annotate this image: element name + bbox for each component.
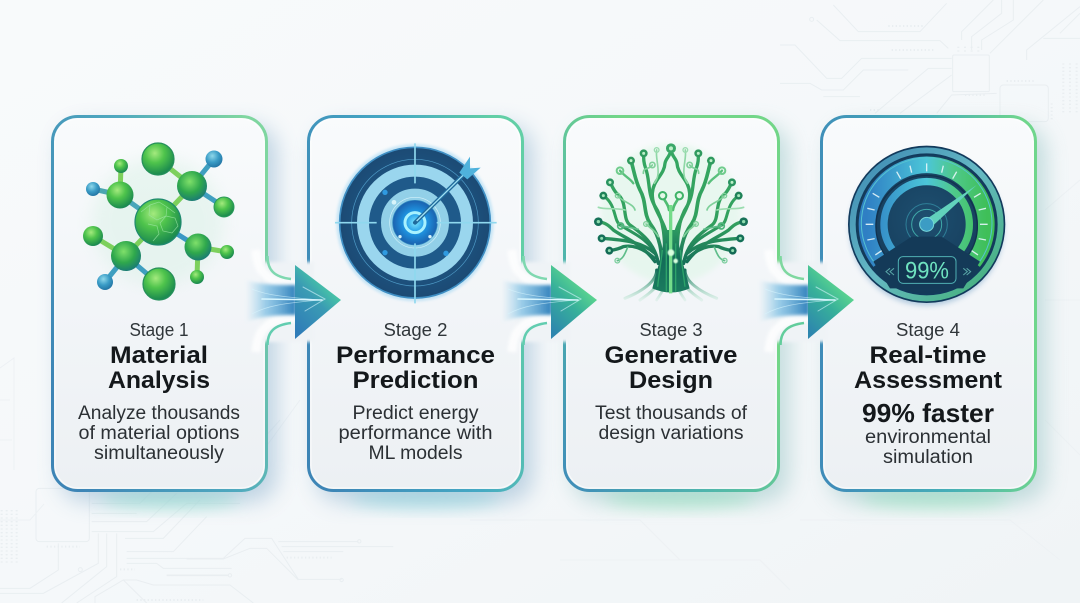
stage 2 text: ML models <box>368 443 462 464</box>
stage 1 text: Material <box>110 342 208 369</box>
panel: stage 3 <box>564 116 789 502</box>
stage 3 text: design variations <box>598 423 744 444</box>
stage 3 text: Stage 3 <box>640 320 702 340</box>
stage 3 text: Generative <box>604 342 738 369</box>
circuit pattern: bottom left <box>0 487 393 603</box>
stage 4 text <box>854 320 1002 468</box>
panel: stage 4 <box>822 116 1046 502</box>
stage 1 text: Analyze thousands <box>78 403 240 424</box>
icon: circuit tree <box>594 143 748 300</box>
stage 3 text: Test thousands of <box>595 403 748 424</box>
circuit pattern: top right <box>780 0 1080 122</box>
arrow: stage 3 to 4 <box>759 250 854 352</box>
stage 1 text: simultaneously <box>94 443 225 464</box>
stage 2 text: performance with <box>338 423 492 444</box>
arrow: stage 1 to 2 <box>246 250 341 352</box>
glow under cards <box>100 488 1010 508</box>
panel: stage 2 <box>308 116 533 502</box>
icon: speed gauge <box>848 146 1005 306</box>
stage 1 text: of material options <box>78 423 240 444</box>
stage 2 text: Stage 2 <box>384 320 448 340</box>
arrow: stage 2 to 3 <box>502 250 597 352</box>
stage 2 text <box>336 320 495 464</box>
stage 1 text <box>78 320 240 464</box>
stage 1 text: Stage 1 <box>130 320 188 340</box>
stage 4 text: Real-time <box>870 342 986 369</box>
trunk <box>652 230 690 292</box>
icon: molecule <box>83 143 234 300</box>
stage 4 text: Stage 4 <box>896 320 960 340</box>
stage 2 text: Prediction <box>352 367 478 394</box>
stage 4 text: simulation <box>883 447 973 468</box>
readout: 99% <box>905 257 949 284</box>
stage 4 text: 99% faster <box>862 398 994 428</box>
stage 1 text: Analysis <box>108 367 210 394</box>
circuit pattern: left side <box>0 180 1080 590</box>
stage 4 text: environmental <box>865 427 991 448</box>
panel: stage 1 <box>52 116 277 502</box>
stage 3 text: Design <box>629 367 713 394</box>
stage 3 text <box>595 320 748 444</box>
stage 2 text: Predict energy <box>352 403 479 424</box>
stage 4 text: Assessment <box>854 367 1002 394</box>
icon: target with arrow <box>335 143 497 303</box>
stage 2 text: Performance <box>336 342 495 369</box>
